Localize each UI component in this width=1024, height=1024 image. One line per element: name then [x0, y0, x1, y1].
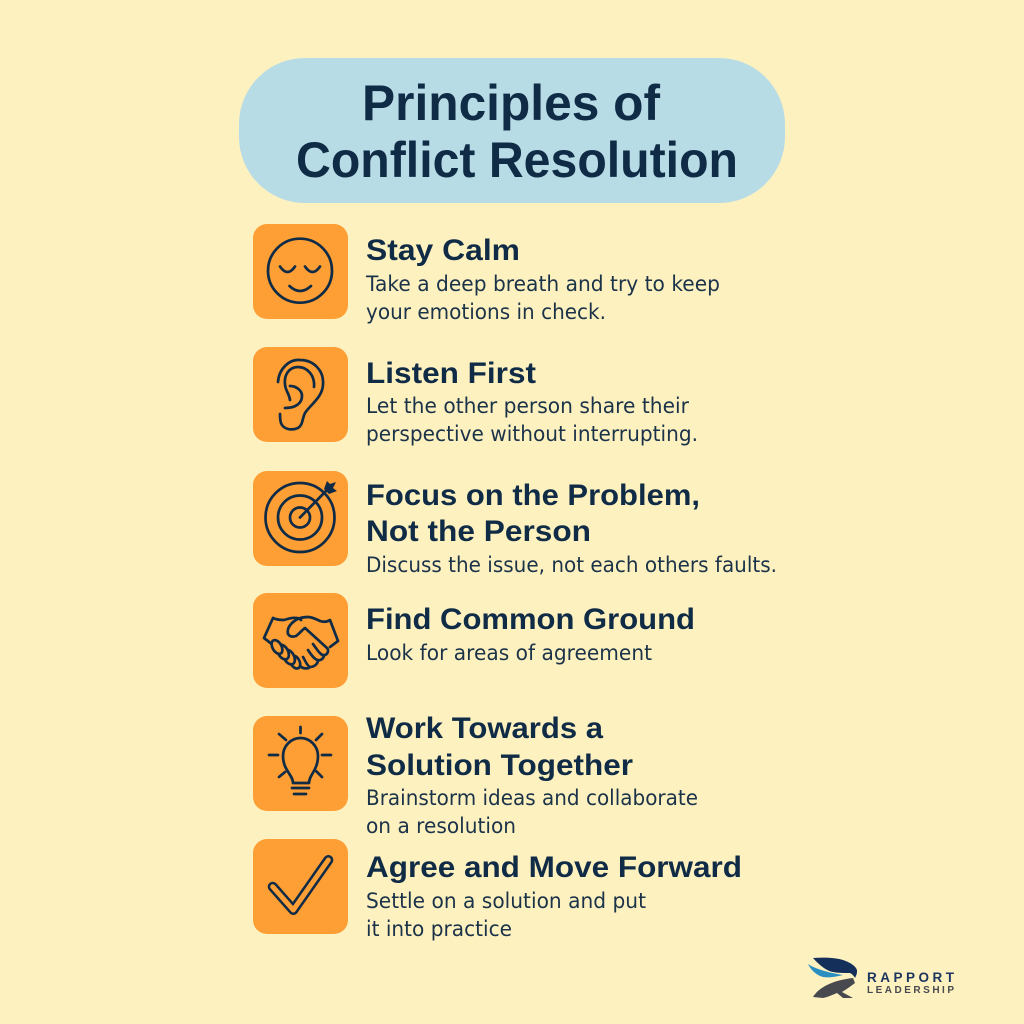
heading: focus on the problem: Not the Person: [366, 515, 591, 548]
heading: stay calm: Stay Calm: [366, 234, 520, 267]
heading: agree and move forward: Agree and Move Forward: [366, 851, 742, 884]
logo: rapport leadership: [808, 958, 955, 998]
title banner: [239, 58, 785, 203]
icon: check mark: [253, 839, 348, 934]
text: solution description: [366, 786, 698, 839]
text: listen first description: perspective without interrupting.: [366, 422, 698, 447]
icon: light bulb: [253, 716, 348, 811]
item: find common ground: [253, 593, 695, 688]
logo: rapport leadership: RAPPORT: [867, 970, 955, 985]
heading: focus on the problem: Focus on the Problem,: [366, 479, 700, 512]
text: agree description: Settle on a solution and put: [366, 889, 646, 914]
text: stay calm description: Take a deep breath and try to keep: [365, 272, 720, 297]
title banner: Conflict Resolution: [296, 132, 738, 188]
text: stay calm description: your emotions in check.: [366, 300, 606, 325]
icon: handshake: [253, 593, 348, 688]
icon: ear: [253, 347, 348, 442]
icon: target with arrow: [253, 471, 348, 566]
heading: find common ground: Find Common Ground: [366, 603, 695, 636]
text: focus description: Discuss the issue, not each others faults.: [366, 553, 777, 578]
text: agree description: it into practice: [366, 917, 512, 942]
text: agree description: [366, 889, 646, 942]
item: work towards a solution: [253, 712, 698, 839]
text: listen first description: [366, 394, 698, 447]
heading: work towards a solution: Work Towards a: [366, 712, 603, 745]
text: listen first description: Let the other person share their: [366, 394, 689, 419]
item: focus on the problem: [253, 471, 777, 578]
item: agree and move forward: [253, 839, 742, 942]
icon: calm face: [253, 224, 348, 319]
text: stay calm description: [365, 272, 720, 325]
text: common ground description: Look for areas of agreement: [366, 641, 652, 666]
text: solution description: on a resolution: [366, 814, 516, 839]
logo: rapport leadership: LEADERSHIP: [867, 985, 954, 996]
text: solution description: Brainstorm ideas and collaborate: [366, 786, 698, 811]
heading: focus on the problem: [366, 479, 700, 548]
item: stay calm: [253, 224, 720, 325]
title banner: Principles of: [362, 75, 660, 131]
heading: work towards a solution: [366, 712, 633, 782]
heading: work towards a solution: Solution Together: [366, 749, 633, 782]
heading: listen first: Listen First: [366, 357, 536, 390]
item: listen first: [253, 347, 698, 447]
